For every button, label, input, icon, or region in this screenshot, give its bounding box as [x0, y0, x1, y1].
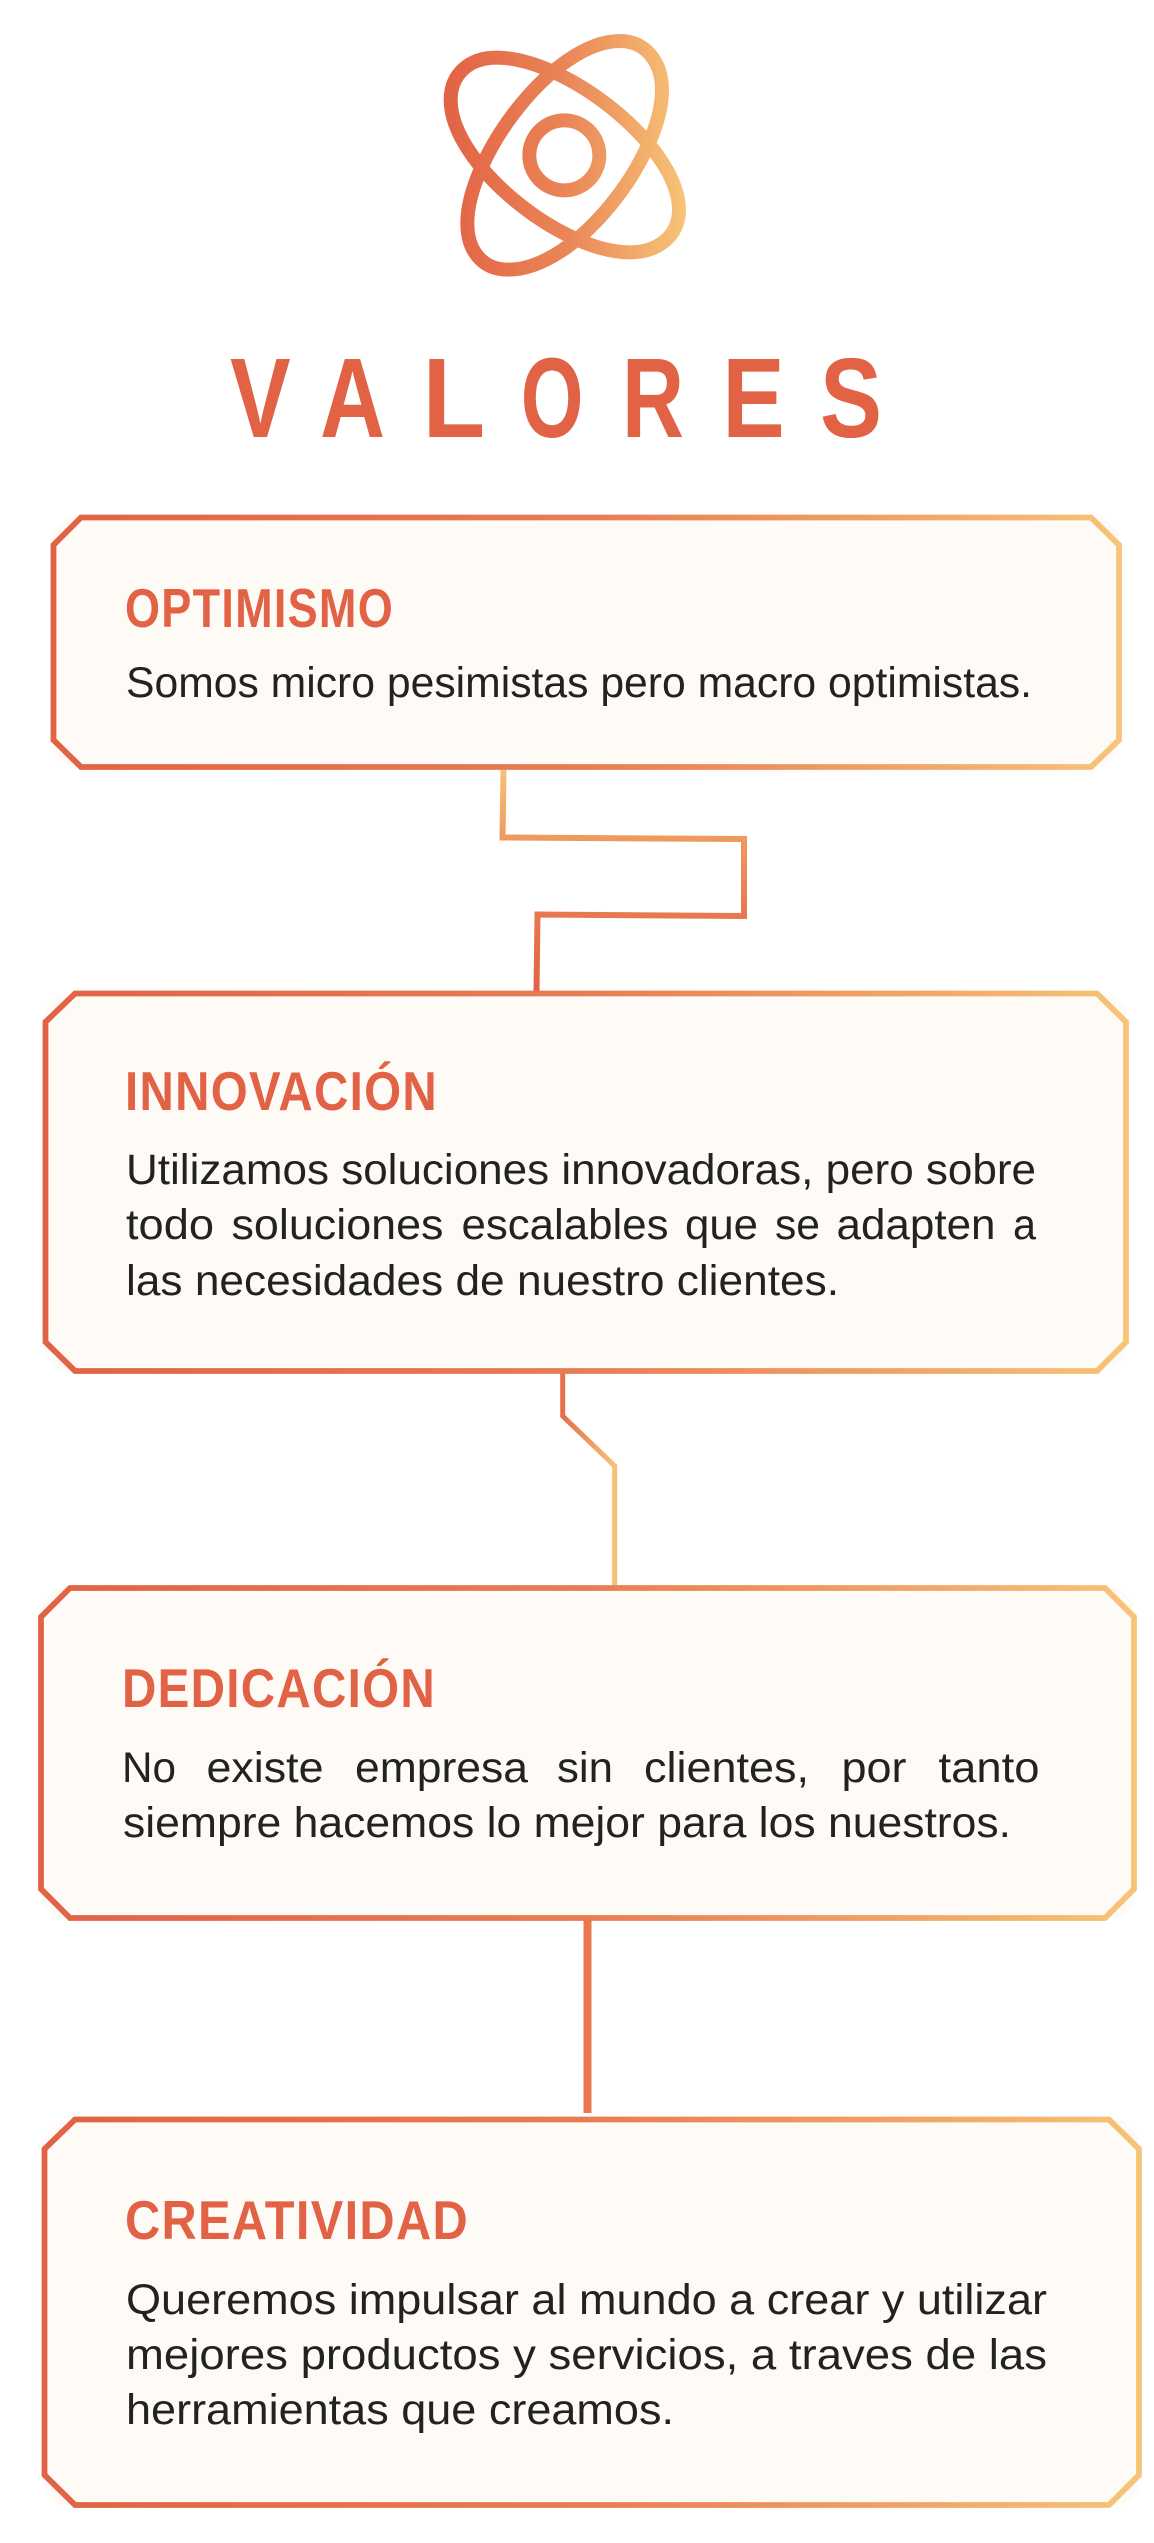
panel: creatividad: [44, 2120, 1139, 2505]
heading: optimismo: OPTIMISMO: [125, 577, 394, 639]
text: optimismo: Somos micro pesimistas pero macro optimistas.: [126, 659, 1032, 707]
title: L: [422, 335, 485, 461]
panel: optimismo: [53, 518, 1119, 767]
heading: innovación: INNOVACIÓN: [125, 1060, 438, 1122]
text: dedicación: No: [122, 1744, 176, 1792]
text: innovación: escalables: [462, 1201, 668, 1249]
panel frame: innovación: [46, 994, 1126, 1371]
connector: dedicación to creatividad: [584, 1919, 592, 2113]
text: creatividad: Queremos impulsar al mundo a crear y utilizar: [126, 2276, 1047, 2324]
heading: dedicación: DEDICACIÓN: [122, 1657, 436, 1719]
text: dedicación: empresa: [355, 1744, 528, 1792]
title: A: [320, 335, 385, 461]
text: innovación: todo: [126, 1201, 214, 1249]
text: innovación: Utilizamos soluciones innovadoras, pero sobre: [126, 1146, 1036, 1194]
title: S: [820, 335, 882, 461]
text: innovación: adapten: [836, 1201, 996, 1249]
panel: innovación: [45, 994, 1126, 1371]
connector: optimismo to innovación: [502, 770, 744, 992]
panel frame: dedicación: [41, 1588, 1134, 1918]
title: O: [521, 335, 584, 461]
text: innovación: las necesidades de nuestro clientes.: [126, 1257, 839, 1305]
title: R: [622, 335, 684, 461]
text: dedicación: clientes,: [644, 1744, 809, 1792]
text: creatividad: herramientas que creamos.: [126, 2386, 674, 2434]
text: innovación: a: [1013, 1201, 1036, 1249]
text: dedicación: existe: [206, 1744, 324, 1792]
text: innovación: soluciones: [232, 1201, 444, 1249]
title: E: [722, 335, 785, 461]
text: innovación: se: [775, 1201, 820, 1249]
text: dedicación: sin: [557, 1744, 613, 1792]
text: innovación: que: [685, 1201, 758, 1249]
panel frame: optimismo: [54, 518, 1119, 767]
panel: dedicación: [41, 1588, 1134, 1918]
heading: creatividad: CREATIVIDAD: [125, 2189, 469, 2251]
connector: innovación to dedicación: [563, 1373, 615, 1588]
text: creatividad: mejores productos y servicios, a traves de las: [126, 2331, 1047, 2379]
text: dedicación: tanto: [938, 1744, 1040, 1792]
text: dedicación: siempre hacemos lo mejor para los nuestros.: [123, 1799, 1011, 1847]
text: dedicación: por: [842, 1744, 906, 1792]
icon: atom: [451, 41, 679, 270]
title: V: [230, 335, 291, 461]
panel frame: creatividad: [44, 2120, 1139, 2505]
